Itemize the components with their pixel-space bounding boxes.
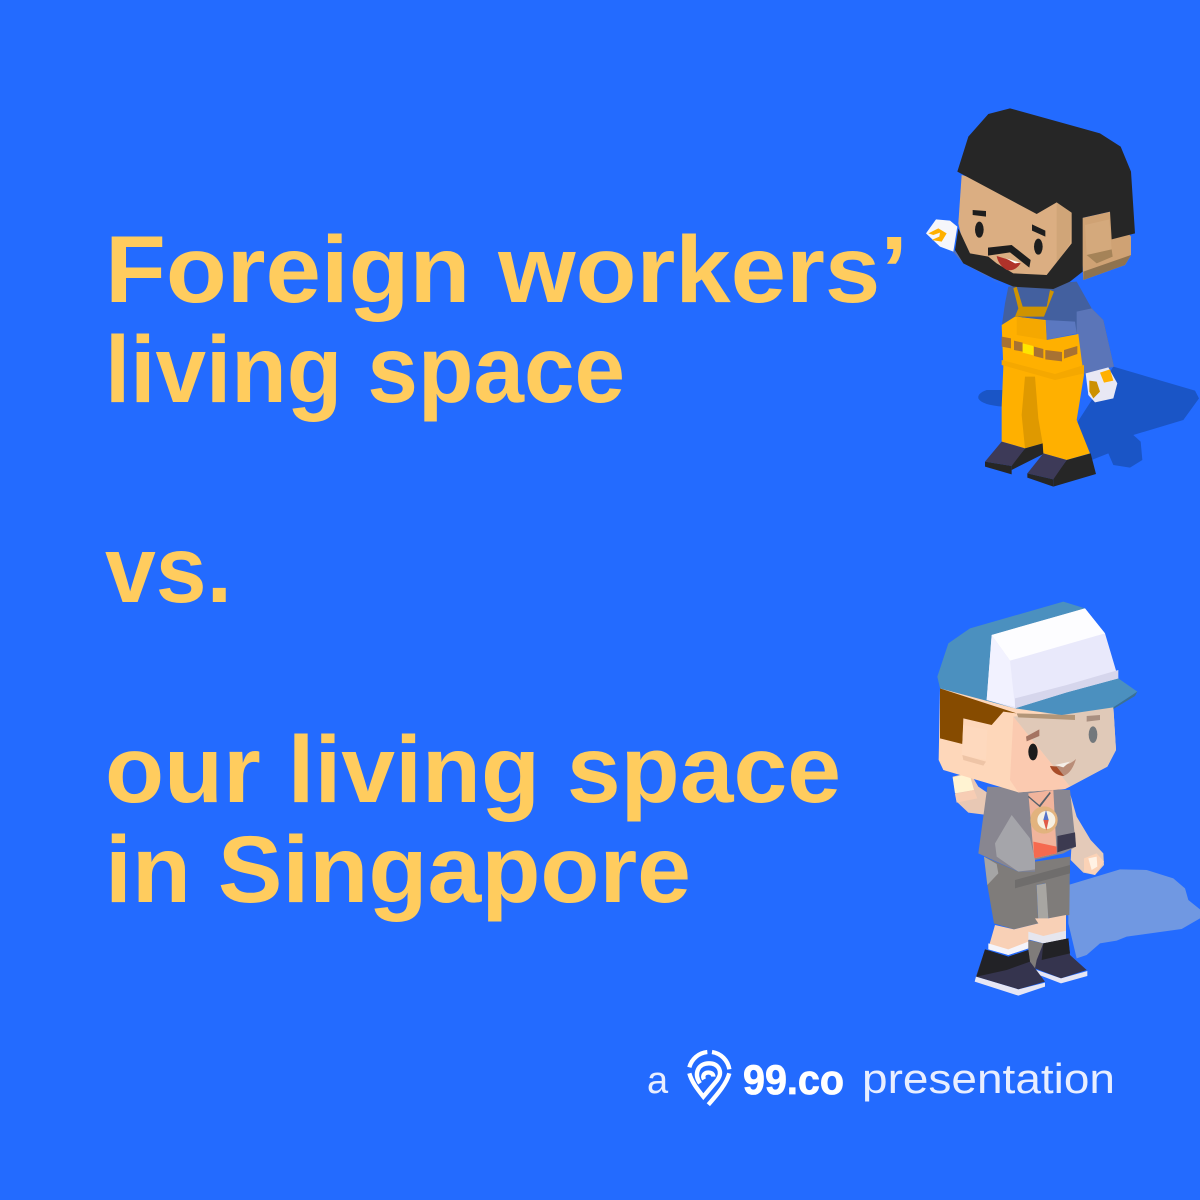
worker shadow bbox=[978, 367, 1199, 468]
title: our living space bbox=[105, 717, 841, 823]
title bbox=[105, 217, 908, 923]
face details bbox=[1026, 715, 1100, 776]
compass medal bbox=[1028, 792, 1058, 834]
left arm raised bbox=[953, 773, 1008, 817]
cap bbox=[937, 602, 1137, 715]
hair bbox=[957, 108, 1135, 239]
icon: 99.co pin logo bbox=[689, 1052, 729, 1105]
icon: boy with cap character bbox=[937, 602, 1200, 996]
head bbox=[939, 688, 1116, 792]
left hand bbox=[926, 219, 1007, 287]
icon: worker character bbox=[926, 108, 1199, 487]
boy shadow bbox=[1068, 869, 1200, 958]
shoes bbox=[975, 938, 1087, 996]
text: 99.co: 99.co bbox=[743, 1056, 844, 1103]
legs and socks bbox=[988, 915, 1066, 968]
text: presentation: presentation bbox=[862, 1055, 1115, 1102]
head bbox=[958, 175, 1131, 287]
shirt and arm bbox=[1002, 282, 1114, 374]
text: a: a bbox=[647, 1060, 669, 1102]
beard bbox=[955, 212, 1083, 289]
vest and shirt bbox=[978, 787, 1076, 872]
shorts bbox=[984, 857, 1070, 929]
footer: 99.co presentation credit bbox=[647, 1052, 1115, 1105]
title: Foreign workers’ bbox=[105, 217, 908, 323]
title: vs. bbox=[105, 517, 232, 623]
overalls bbox=[1002, 287, 1090, 460]
title: in Singapore bbox=[105, 817, 691, 923]
right arm bbox=[1070, 793, 1104, 875]
face details bbox=[973, 210, 1045, 270]
right hand bbox=[1086, 367, 1117, 402]
boots bbox=[985, 442, 1096, 487]
title: living space bbox=[105, 317, 625, 423]
